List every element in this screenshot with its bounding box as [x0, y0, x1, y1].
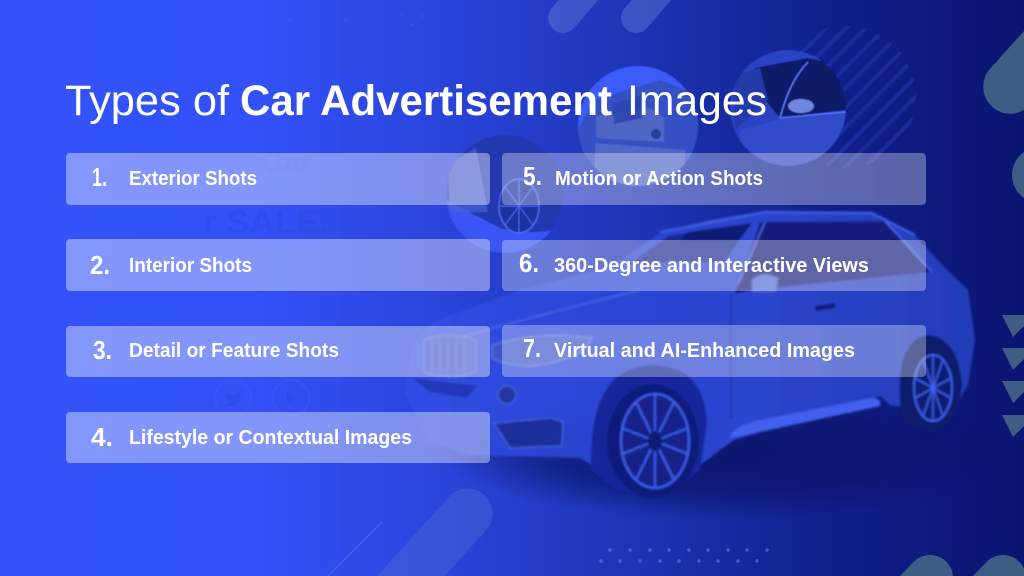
item 1: Exterior Shots: Exterior Shots	[129, 167, 257, 190]
faded background ad text: r SALE.	[203, 204, 329, 240]
windows	[630, 223, 752, 264]
rear wheel	[900, 335, 962, 432]
item 2: Interior Shots: Interior Shots	[129, 254, 252, 277]
faded background ad text: Car	[262, 146, 312, 179]
item 6: 360-Degree and Interactive Views: 360-Degree and Interactive Views	[554, 254, 869, 277]
bumper dark band	[412, 378, 478, 398]
grille	[424, 335, 476, 377]
item 4: Lifestyle or Contextual Images: Lifestyle or Contextual Images	[129, 426, 412, 449]
title: Types of	[65, 77, 230, 125]
title: Car Advertisement	[240, 77, 612, 125]
item 3: Detail or Feature Shots: 3.	[93, 335, 112, 365]
fog light	[498, 386, 516, 404]
item 1: Exterior Shots: 1.	[92, 162, 107, 192]
decorative dots	[260, 12, 769, 563]
item 7: Virtual and AI-Enhanced Images: 7.	[523, 333, 541, 363]
car photo	[405, 211, 1020, 520]
detail circle: car door	[730, 50, 846, 170]
car body	[405, 211, 975, 470]
faded background ad text	[203, 146, 329, 240]
item 3: Detail or Feature Shots: Detail or Feature Shots	[129, 339, 339, 362]
item 5: Motion or Action Shots: 5.	[523, 161, 542, 191]
detail circle: car front	[578, 66, 700, 186]
item 2: Interior Shots	[66, 239, 490, 291]
bumper vent	[494, 418, 563, 448]
item 7: Virtual and AI-Enhanced Images: Virtual and AI-Enhanced Images	[554, 339, 855, 362]
item 2: Interior Shots: 2.	[90, 250, 110, 280]
faded social icons	[215, 380, 309, 416]
decorative capsules and triangles	[328, 0, 1024, 576]
striped circle	[774, 26, 916, 168]
title: Images	[627, 77, 767, 125]
item 1: Exterior Shots	[66, 153, 490, 205]
item 5: Motion or Action Shots: Motion or Action Shots	[555, 167, 763, 190]
side mirror	[752, 274, 778, 292]
item 7: Virtual and AI-Enhanced Images	[502, 325, 926, 377]
item 4: Lifestyle or Contextual Images: 4.	[91, 422, 113, 452]
item 6: 360-Degree and Interactive Views	[502, 240, 926, 291]
item 4: Lifestyle or Contextual Images	[66, 412, 490, 463]
detail circle: wheel	[446, 135, 564, 253]
item 3: Detail or Feature Shots	[66, 326, 490, 377]
item 5: Motion or Action Shots	[502, 153, 926, 205]
headlight	[492, 335, 592, 366]
car ground shadow	[440, 384, 1020, 520]
front wheel	[591, 365, 707, 498]
title	[65, 77, 767, 125]
door lines and highlights	[730, 294, 732, 418]
item 6: 360-Degree and Interactive Views: 6.	[519, 248, 539, 278]
